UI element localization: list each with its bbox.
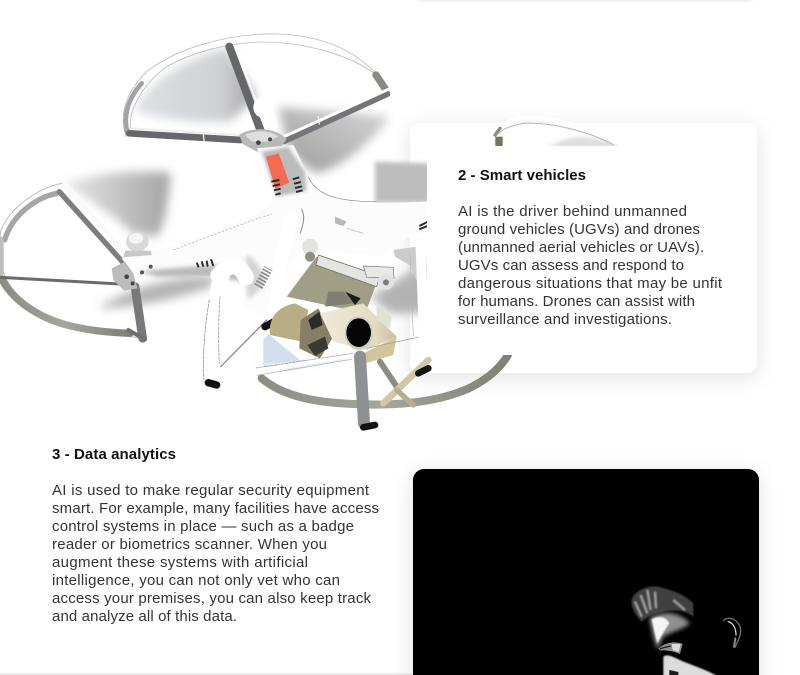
body vents <box>197 177 427 267</box>
bottom rotor guard <box>256 335 508 427</box>
indicator panel <box>266 153 289 189</box>
text block: smart vehicles: ground vehicles (UGVs) and drones <box>458 221 700 238</box>
text block: data analytics: reader or biometrics scanner. When you <box>52 536 327 553</box>
text block: data analytics: and analyze all of this data. <box>52 608 237 625</box>
text block: data analytics: intelligence, you can not only vet who can <box>52 572 340 589</box>
rotor guard: left <box>0 183 146 339</box>
heading: data analytics: 3 - Data analytics <box>52 446 176 463</box>
text block: data analytics: control systems in place — such as a badge <box>52 518 354 535</box>
nose and cheek <box>663 655 718 675</box>
ear <box>723 618 741 647</box>
text block: smart vehicles: for humans. Drones can assist with <box>458 293 695 310</box>
rotor guard: right, behind card <box>495 117 623 152</box>
photo: man's face in shadow <box>632 586 741 675</box>
camera motor <box>299 308 333 358</box>
eye <box>658 642 683 654</box>
drone body <box>112 145 430 317</box>
lower blue sheen <box>263 330 352 370</box>
text block: data analytics: AI is used to make regular security equipment <box>52 482 370 499</box>
text block: data analytics: smart. For example, many facilities have access <box>52 500 379 517</box>
camera lens <box>346 318 371 347</box>
camera gimbal <box>270 239 425 363</box>
text block: data analytics <box>52 482 379 625</box>
left motor <box>126 232 149 252</box>
bottom page edge <box>0 673 412 675</box>
top card edge <box>418 0 752 1</box>
text block: smart vehicles: AI is the driver behind unmanned <box>458 203 687 220</box>
image: drone <box>0 34 623 427</box>
text block: smart vehicles: surveillance and investigations. <box>458 311 672 328</box>
motor: upper <box>239 97 287 152</box>
heading: smart vehicles: 2 - Smart vehicles <box>458 167 586 184</box>
rotor guard: upper <box>123 34 388 141</box>
body shading <box>262 147 307 197</box>
text block: smart vehicles: (unmanned aerial vehicles or UAVs). <box>458 239 704 256</box>
propeller shadows <box>65 48 433 313</box>
text block: smart vehicles: dangerous situations that may be unfit <box>458 275 723 292</box>
landing gear: left <box>204 209 304 385</box>
hair <box>632 586 693 622</box>
text block: smart vehicles: UGVs can assess and respond to <box>458 257 684 274</box>
panel: dark portrait photo <box>413 469 759 675</box>
text block: data analytics: augment these systems with artificial <box>52 554 308 571</box>
text block: smart vehicles <box>458 203 723 328</box>
panel: smart vehicles card <box>410 123 757 373</box>
card text mask <box>427 146 755 355</box>
forehead <box>649 613 690 649</box>
right leg <box>421 247 424 340</box>
text block: data analytics: access your premises, you can also keep track <box>52 590 372 607</box>
